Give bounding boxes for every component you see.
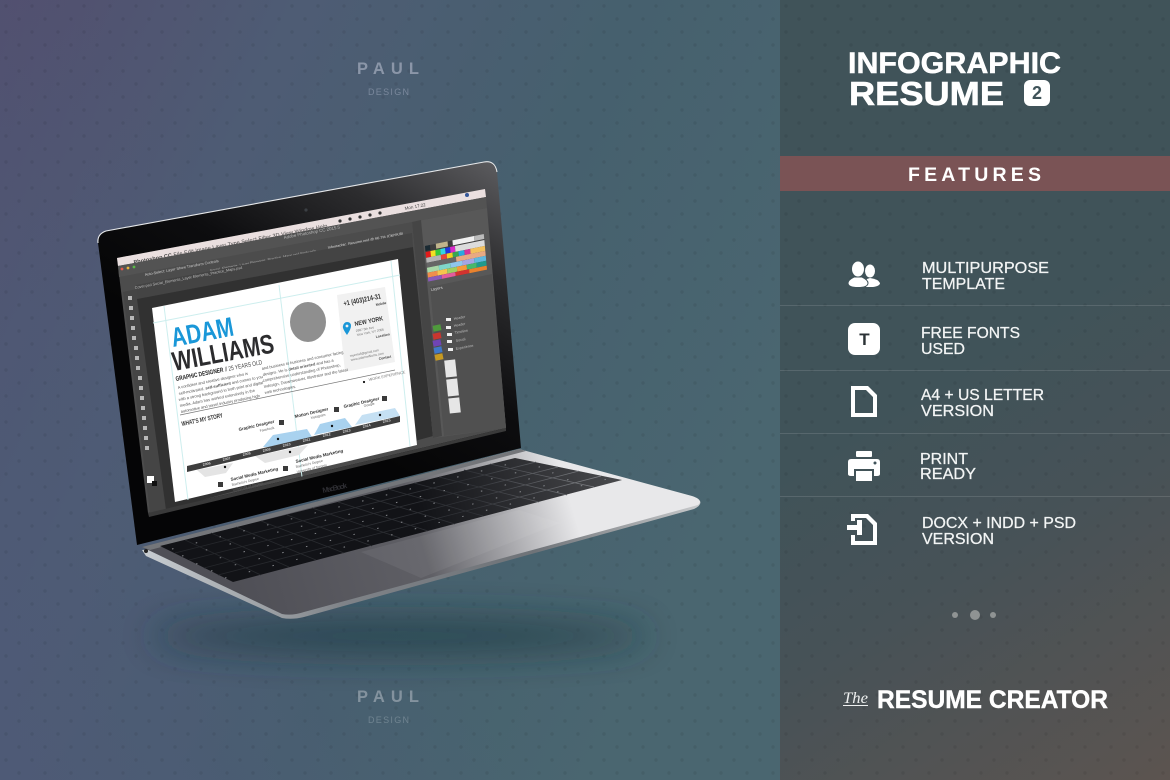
icon: T badge: T [859, 330, 870, 349]
canvas area [137, 247, 433, 510]
trackpad [361, 510, 560, 578]
label [921, 387, 1044, 420]
contact panel: myemail@gmail.com [349, 348, 380, 358]
layers panel: Social [455, 337, 466, 343]
OS menu bar: Photoshop CC File Edit Image Layer Type Select Filter 3D View Window Help [133, 223, 328, 266]
watermark: top: PAUL [357, 60, 419, 78]
label: VERSION [922, 531, 994, 548]
label [922, 260, 1049, 293]
label: A4 + US LETTER [921, 387, 1044, 404]
icon: document [851, 386, 877, 417]
Photoshop window chrome: Social_Elements_Layer Elements_Practice_Maps.psd Body.psb [209, 249, 316, 273]
Photoshop window chrome: Adobe Photoshop CC 2015.5 [283, 224, 341, 240]
icon: document plus [847, 514, 877, 545]
timeline: 2011 [302, 437, 311, 443]
panel: features sidebar [780, 0, 1170, 780]
watermark: top [357, 60, 419, 97]
laptop shadow [150, 619, 650, 653]
laptop base [142, 449, 700, 619]
timeline: Graphic Designer [343, 396, 380, 409]
contact panel: 2887 5th Ave [355, 325, 375, 333]
resume document [152, 259, 417, 502]
layers panel: Layers [430, 285, 443, 292]
contact panel [337, 287, 395, 372]
layer thumbnails [444, 359, 461, 413]
icon: printer [848, 451, 880, 481]
features banner [780, 156, 1170, 191]
timeline: Google [363, 402, 375, 408]
keyboard [160, 458, 622, 582]
timeline: Social Media Marketing [230, 466, 279, 482]
guides [153, 261, 410, 500]
watermark: top: DESIGN [368, 87, 409, 97]
profile paragraph left [177, 371, 264, 414]
feature: multipurpose template [848, 260, 1049, 293]
title: RESUME [849, 75, 1004, 112]
label: READY [920, 466, 976, 483]
label: TEMPLATE [922, 276, 1005, 293]
OS menu bar [117, 189, 486, 266]
watermark: bottom: DESIGN [368, 715, 409, 725]
timeline: Instagram [310, 413, 326, 420]
watermark: bottom: PAUL [357, 688, 419, 706]
name: WILLIAMS: WILLIAMS [170, 329, 276, 377]
title: INFOGRAPHIC [848, 47, 1061, 80]
timeline: Social Media Marketing [295, 448, 344, 464]
label: PRINT [920, 451, 969, 468]
layers panel [430, 274, 506, 436]
feature: A4 + US letter version [851, 386, 1044, 420]
icon: T badge [848, 323, 880, 355]
label [920, 451, 976, 483]
camera [304, 208, 308, 212]
contact panel: Location [375, 332, 390, 339]
contact panel: www.adamwilliams.com [350, 351, 385, 362]
label: USED [921, 341, 965, 358]
layers panel: Header [453, 322, 467, 328]
profile paragraph right: and business to business and consumer facing [261, 349, 344, 371]
profile paragraph left: automotive and travel industry producing high [180, 393, 260, 414]
colour swatches [425, 234, 487, 282]
timeline: 2014 [362, 423, 371, 429]
title [848, 47, 1061, 112]
layers panel: Timeline [454, 328, 468, 335]
feature: docx indd psd version [847, 514, 1076, 548]
section heading: WHAT'S MY STORY [181, 412, 224, 428]
icon: people [848, 261, 880, 288]
timeline: University of Toronto [232, 481, 263, 492]
feature: free fonts used [848, 323, 1020, 358]
timeline: Bachelor's Degree [231, 477, 259, 487]
photo circle [290, 302, 326, 342]
timeline [187, 396, 400, 492]
profile paragraph right: Indesign, Dreamweaver, Illustrator and the latest [263, 367, 349, 389]
Photoshop window chrome: Auto-Select: Layer Show Transform Controls [144, 259, 219, 277]
label [921, 325, 1020, 358]
pagination dots [952, 610, 996, 620]
status bar [148, 428, 506, 517]
lid rim highlight [98, 162, 497, 243]
badge: 2: 2 [1032, 83, 1042, 103]
name: ADAM: ADAM [169, 312, 236, 353]
brand: The Resume Creator: The [843, 690, 868, 707]
job title: GRAPHIC DESIGNER // 25 YEARS OLD [175, 359, 263, 383]
right panels [412, 208, 506, 438]
timeline: Facebook [259, 426, 275, 433]
tool strip [123, 289, 166, 513]
label: DOCX + INDD + PSD [922, 515, 1076, 532]
layers panel: Experience [455, 344, 474, 351]
Photoshop window chrome: Infographic_Resume.psd @ 66.7% (CMYK/8) [327, 232, 404, 250]
laptop lid [98, 162, 521, 545]
profile paragraph right [261, 349, 349, 395]
badge: 2 [1024, 80, 1050, 106]
label: FREE FONTS [921, 325, 1020, 342]
profile paragraph right: web technologies. [264, 384, 297, 395]
contact panel: New York, NY 2056 [356, 328, 384, 337]
brand: The Resume Creator: RESUME CREATOR [877, 686, 1108, 714]
Photoshop window chrome: Cover.psd Social_Elements_Layer Elements_Practice_Maps.psd [134, 266, 243, 290]
timeline: Graphic Designer [238, 419, 275, 432]
Photoshop window chrome [118, 197, 487, 299]
layers panel: Header [453, 315, 467, 321]
timeline: 2008 [242, 451, 251, 457]
profile paragraph left: self-motivated, self-sufficient and comes to you [178, 374, 263, 396]
timeline: University of Toronto [296, 463, 327, 474]
timeline: 2009 [262, 447, 271, 453]
contact panel: NEW YORK [354, 315, 384, 328]
resume document: WORK EXPERIENCE [368, 370, 406, 382]
contact panel: Mobile [375, 301, 387, 307]
contact panel: +1 (403)214-31 [343, 292, 382, 308]
background: left area [0, 0, 780, 780]
feature: print ready [848, 451, 976, 483]
features banner: FEATURES [908, 164, 1041, 186]
timeline: 2013 [342, 428, 351, 434]
profile paragraph right: comprehensive understanding of Photoshop, [262, 362, 341, 383]
timeline: 2010 [282, 442, 291, 448]
label [922, 515, 1076, 548]
watermark: bottom [357, 688, 419, 725]
contact panel: Contact [378, 354, 392, 361]
section divider [180, 370, 395, 415]
timeline: 2007 [222, 456, 231, 462]
profile paragraph left: with a strong background in both print and digital [178, 380, 264, 402]
screen [117, 189, 506, 517]
profile paragraph left: A confident and creative designer who is [177, 371, 248, 390]
MacBook label: MacBook [322, 481, 349, 495]
timeline: Motion Designer [294, 406, 329, 419]
profile paragraph left: media. Adam has worked extensively in the [179, 388, 256, 408]
timeline: 2015 [382, 418, 391, 424]
OS menu bar: Mon 17:22 [404, 202, 427, 211]
profile paragraph right: designs. He is detail oriented and has a [262, 358, 335, 377]
label: VERSION [921, 403, 994, 420]
timeline: Bachelor's Degree [295, 459, 323, 469]
laptop [98, 162, 700, 619]
label: MULTIPURPOSE [922, 260, 1049, 277]
timeline: 2012 [322, 432, 331, 438]
timeline: 2006 [202, 461, 211, 467]
